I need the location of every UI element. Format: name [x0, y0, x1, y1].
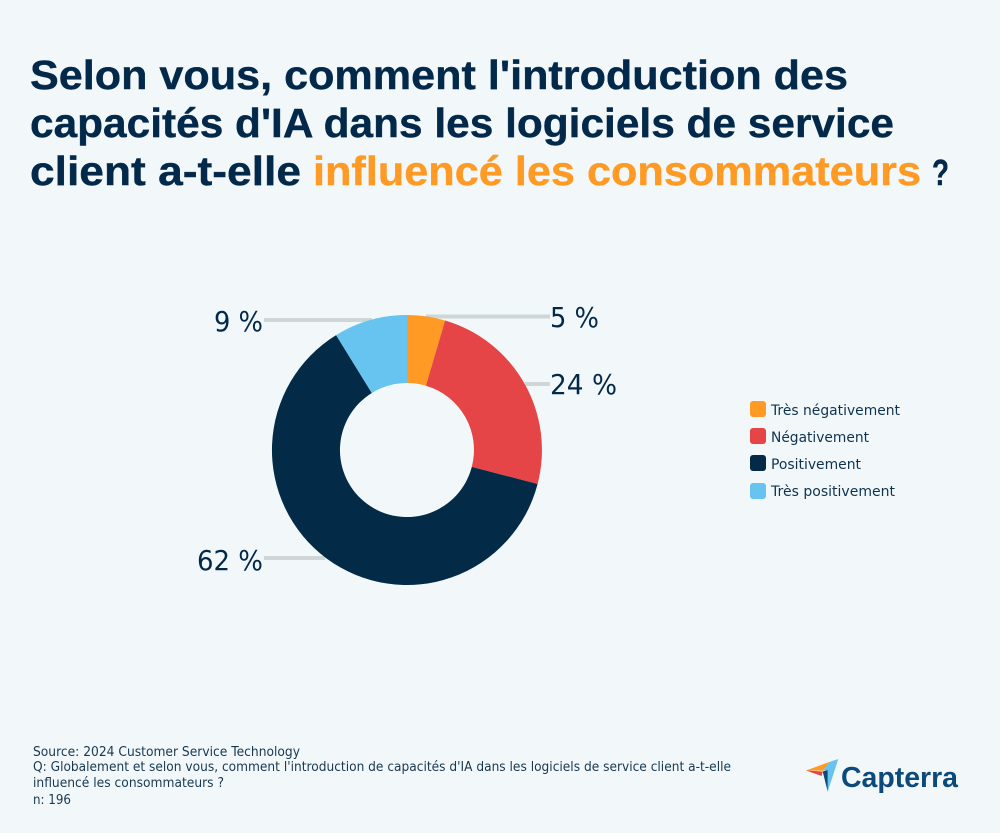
- segment: très positivement 9 %: [336, 315, 407, 393]
- donut chart: [264, 315, 550, 585]
- title: client a-t-elle: [30, 148, 301, 194]
- data labels: [197, 301, 617, 577]
- title: ?: [932, 152, 949, 193]
- legend item: très positivement: Très positivement: [770, 484, 896, 500]
- title: influencé les consommateurs: [313, 148, 921, 194]
- legend item: positivement: Positivement: [771, 457, 861, 473]
- title: capacités d'IA dans les logiciels de service: [30, 100, 894, 146]
- source note: Source: 2024 Customer Service Technology: [33, 745, 300, 760]
- leader lines: [264, 316, 550, 558]
- source note: Q: Globalement et selon vous, comment l'introduction de capacités d'IA dans les logiciels de service client a-t-elle: [33, 760, 731, 775]
- source note: [33, 745, 731, 808]
- legend item: très négativement: Très négativement: [770, 403, 900, 419]
- Capterra logo: [806, 759, 959, 794]
- legend item: négativement: Négativement: [771, 430, 869, 446]
- source note: influencé les consommateurs ?: [33, 776, 224, 791]
- data labels: 9 %: [214, 305, 263, 338]
- title: Selon vous, comment l'introduction des: [30, 52, 848, 98]
- segment: négativement 24 %: [426, 320, 542, 484]
- source note: n: 196: [33, 793, 71, 808]
- title: [30, 52, 949, 194]
- legend: [750, 401, 900, 500]
- wordmark: Capterra: [841, 762, 959, 794]
- data labels: 24 %: [550, 368, 617, 401]
- data labels: 62 %: [197, 544, 263, 577]
- segment: très négativement 5 %: [407, 315, 445, 386]
- segment: positivement 62 %: [272, 335, 538, 585]
- data labels: 5 %: [550, 301, 599, 334]
- icon: Capterra arrow: [806, 759, 838, 792]
